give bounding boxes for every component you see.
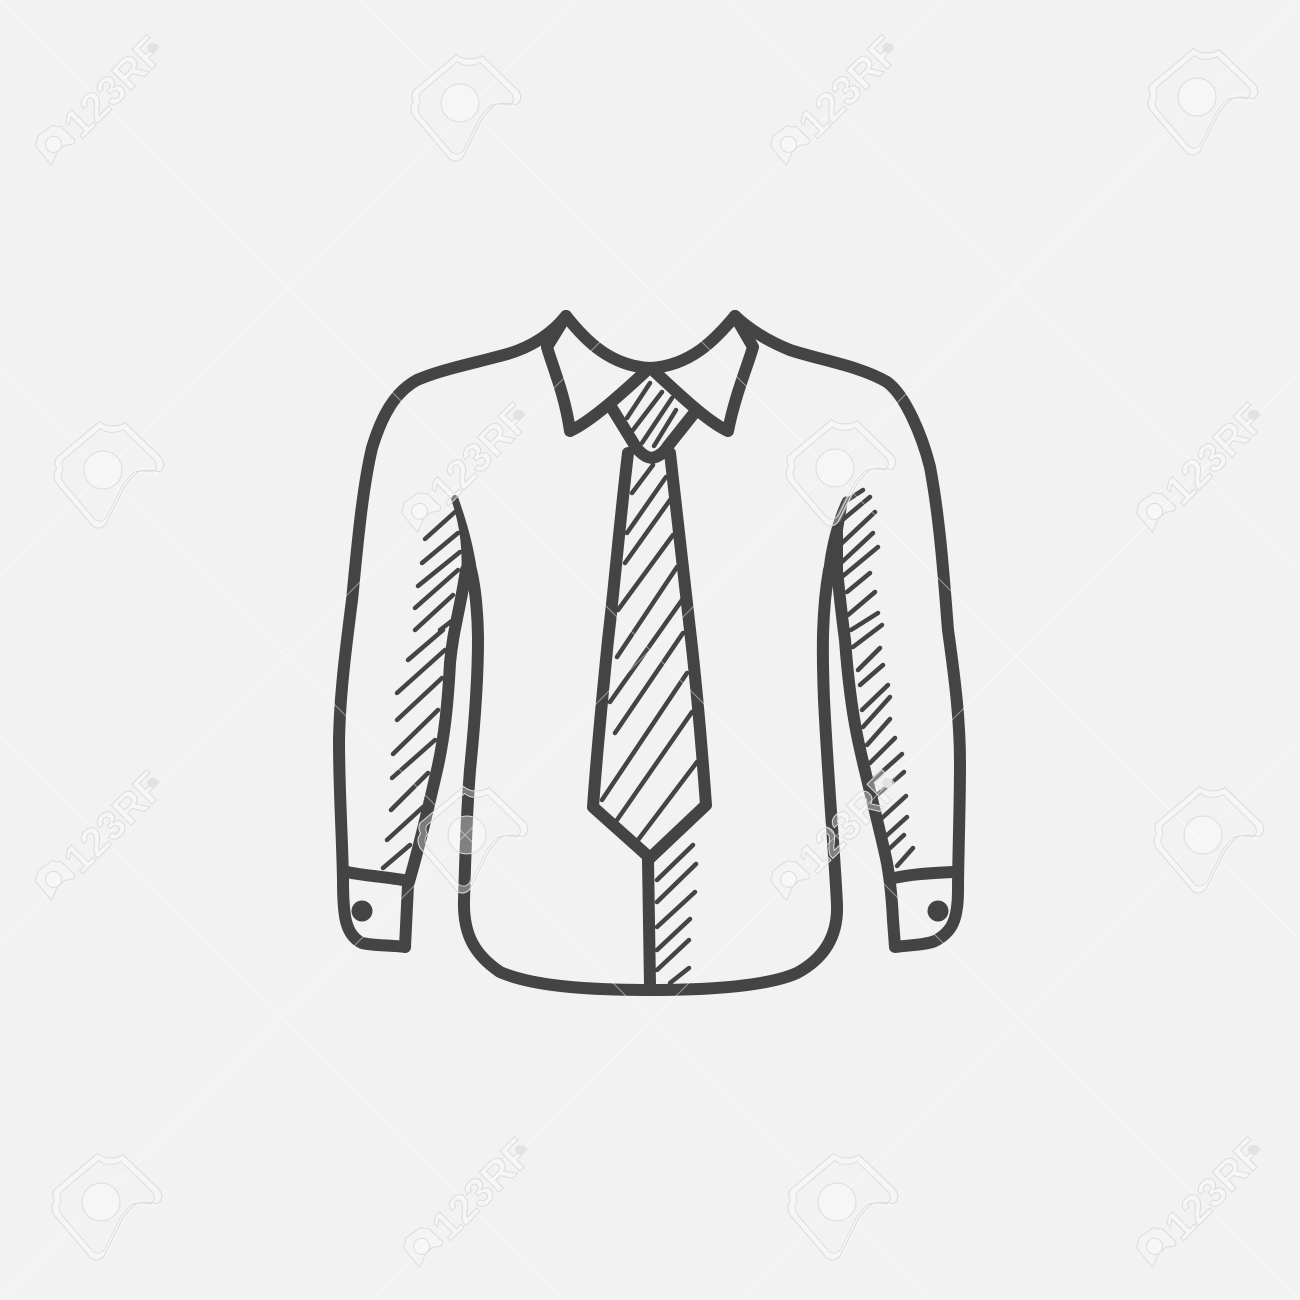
watermark: 123RF bottom right (1117, 1125, 1278, 1287)
watermark: 123RF middle centre-left (382, 390, 543, 552)
watermark: 123RF lower centre-right (751, 758, 912, 920)
watermark: 123RF top left (16, 23, 177, 185)
watermark: 123RF middle centre-left: 123RF (421, 394, 540, 514)
right sleeve and shoulder outline (735, 316, 960, 947)
watermark: 123RF top centre-right (751, 23, 912, 185)
watermark: 123RF top left: 123RF (55, 27, 174, 147)
shirt body outline (464, 570, 837, 990)
watermark: egg bottom centre (788, 1154, 898, 1260)
right sleeve hatching (840, 490, 913, 866)
left cuff and inner sleeve (405, 570, 466, 947)
watermark: egg middle left (54, 422, 164, 528)
tie blade (593, 453, 706, 858)
right cuff button (928, 900, 948, 922)
tie (593, 383, 706, 985)
watermark: 123RF middle right (1117, 390, 1278, 552)
left cuff button (352, 900, 372, 922)
left sleeve hatching (383, 512, 460, 868)
watermark: egg top right (1148, 48, 1258, 155)
placket line (648, 860, 650, 985)
left collar wing (547, 316, 645, 431)
watermark: egg lower centre-left (418, 786, 528, 893)
neckline curve (566, 316, 735, 368)
left underarm tip (451, 495, 478, 578)
watermark: egg top centre-left (411, 54, 521, 161)
tie blade hatching (602, 465, 697, 840)
tie knot (610, 405, 695, 458)
watermark: egg bottom left (52, 1154, 162, 1260)
watermark: 123RF top centre-right: 123RF (790, 27, 909, 147)
placket hatching (657, 845, 696, 983)
left cuff band (347, 872, 408, 881)
collar (547, 316, 753, 431)
right underarm tip (823, 496, 848, 575)
watermark: egg lower right (1154, 786, 1264, 893)
watermark: 123RF lower centre-right: 123RF (790, 762, 909, 882)
watermark: 123RF bottom right: 123RF (1156, 1129, 1275, 1249)
tie knot hatching (627, 383, 676, 446)
watermark: 123RF lower left (16, 758, 177, 920)
watermark: 123RF bottom centre-left: 123RF (423, 1129, 542, 1249)
right cuff band (890, 872, 952, 879)
left sleeve and shoulder outline (339, 316, 566, 947)
right collar wing (655, 316, 753, 431)
watermark: 123RF middle right: 123RF (1156, 394, 1275, 514)
watermark: egg middle centre (786, 420, 896, 526)
shirt (339, 316, 960, 990)
watermark: 123RF lower left: 123RF (55, 762, 174, 882)
watermark: 123RF bottom centre-left (384, 1125, 545, 1287)
